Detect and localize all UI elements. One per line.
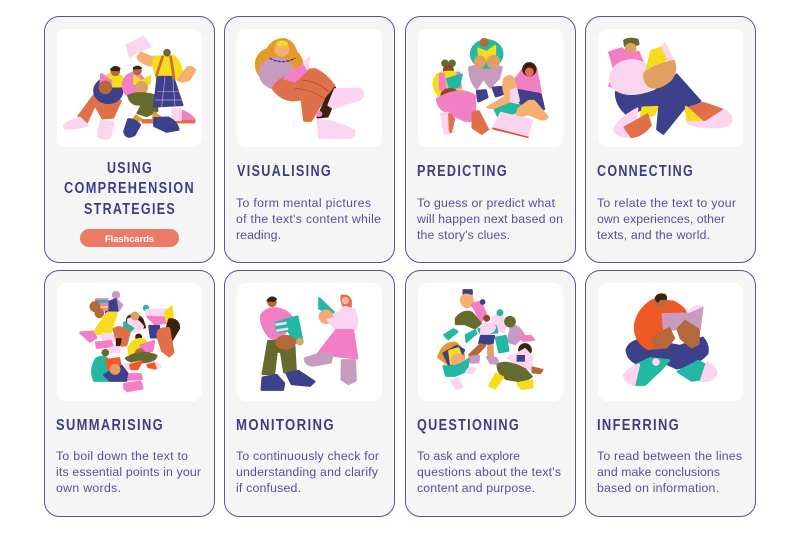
description: understanding and clarify	[236, 465, 379, 479]
illustration: group discussing books	[438, 290, 542, 389]
panel: connecting	[586, 16, 756, 262]
panel: using comprehension strategies	[44, 16, 214, 262]
illustration: three friends reading on the floor	[434, 39, 547, 138]
button: flashcards: Flashcards	[105, 234, 154, 244]
description: To form mental pictures	[236, 196, 371, 210]
description: content and purpose.	[417, 481, 535, 495]
description: will happen next based on	[416, 212, 563, 226]
description: and make conclusions	[597, 465, 720, 479]
description	[56, 449, 201, 495]
description	[597, 196, 736, 242]
panel: summarising	[44, 270, 214, 516]
panel: monitoring	[224, 270, 394, 516]
button: flashcards	[80, 229, 179, 247]
heading: title: USING	[107, 160, 153, 177]
heading: summarising: SUMMARISING	[56, 417, 164, 434]
illustration: woman reading with crossed legs	[256, 39, 363, 138]
description	[417, 449, 561, 495]
description	[236, 449, 379, 495]
description: To relate the text to your	[597, 196, 736, 210]
heading: predicting: PREDICTING	[417, 163, 508, 180]
heading: connecting: CONNECTING	[597, 163, 694, 180]
description: To boil down the text to	[56, 449, 188, 463]
panel: inferring	[586, 270, 756, 516]
heading: questioning: QUESTIONING	[417, 417, 520, 434]
heading: inferring: INFERRING	[597, 417, 680, 434]
description	[236, 196, 381, 242]
heading: title: COMPREHENSION	[64, 180, 195, 197]
illustration: three people reading	[64, 37, 195, 138]
heading: title: STRATEGIES	[84, 201, 176, 218]
description	[416, 196, 563, 242]
illustration: person sitting cross-legged reading	[624, 295, 717, 385]
panel: visualising	[224, 16, 394, 262]
description: if confused.	[236, 481, 301, 495]
description: based on information.	[597, 481, 719, 495]
description: To read between the lines	[597, 449, 742, 463]
description: questions about the text's	[417, 465, 561, 479]
description: To continuously check for	[236, 449, 379, 463]
description: To guess or predict what	[417, 196, 556, 210]
illustration: person reading a yellow book	[609, 39, 731, 137]
description: To ask and explore	[417, 449, 520, 463]
description: the story's clues.	[417, 228, 510, 242]
description: own words.	[56, 481, 121, 495]
illustration: two people holding books	[261, 296, 357, 390]
panel: predicting	[406, 16, 576, 262]
heading: monitoring: MONITORING	[236, 417, 335, 434]
panel: questioning	[406, 270, 576, 516]
description	[597, 449, 742, 495]
description: own experiences, other	[597, 212, 725, 226]
heading: visualising: VISUALISING	[237, 163, 332, 180]
description: reading.	[236, 228, 281, 242]
description: texts, and the world.	[597, 228, 710, 242]
description: of the text's content while	[236, 212, 381, 226]
description: its essential points in your	[56, 465, 201, 479]
illustration: group of five readers	[80, 292, 179, 391]
heading: title	[64, 160, 195, 218]
